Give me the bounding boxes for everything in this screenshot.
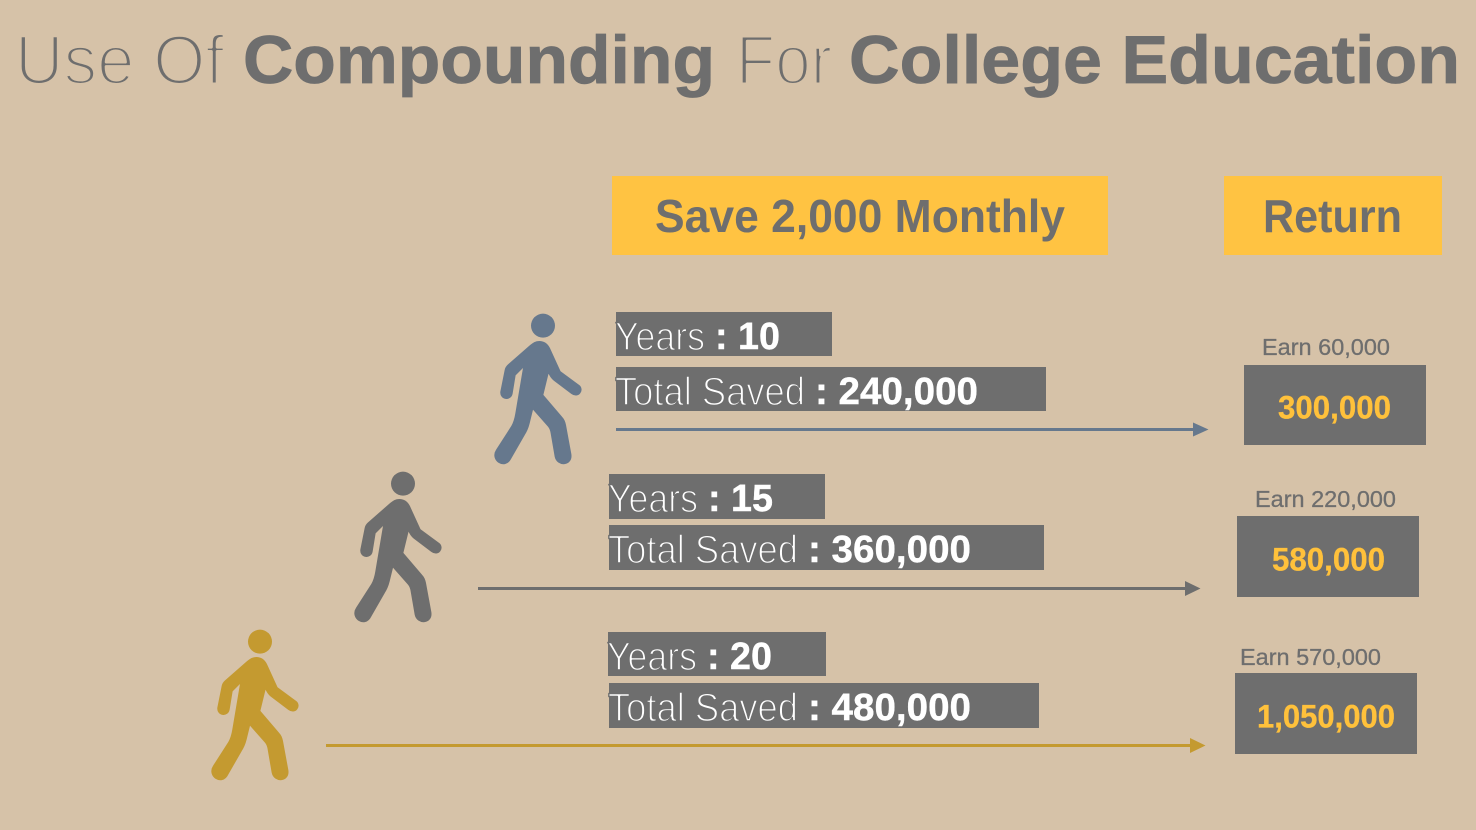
heading: return <box>1224 176 1442 255</box>
row 2: years: : 15 <box>708 478 773 520</box>
row 2: return box: 580,000 <box>1272 542 1385 578</box>
row 3: earnings label: Earn 570,000 <box>1240 644 1381 670</box>
heading: save 2,000 monthly: Save 2,000 Monthly <box>655 190 1065 242</box>
row 2: years <box>608 474 825 521</box>
row 3: years: : 20 <box>707 636 772 678</box>
arrow: row 3 <box>326 738 1206 753</box>
row 3: years <box>607 632 826 679</box>
icon: grey walking person <box>355 472 441 622</box>
row 3: return box: 1,050,000 <box>1257 698 1395 734</box>
row 1: total saved: : 240,000 <box>815 371 978 413</box>
row 2: earnings label: Earn 220,000 <box>1255 486 1396 512</box>
arrow: row 2 <box>478 581 1200 596</box>
title <box>15 21 1460 99</box>
heading: save 2,000 monthly <box>612 176 1108 255</box>
arrow: row 1 <box>616 422 1208 436</box>
title: Use Of <box>15 21 225 99</box>
icon: gold walking person <box>212 630 298 780</box>
row 3: total saved: : 480,000 <box>808 687 971 729</box>
icon: blue walking person <box>495 314 581 464</box>
row 3: total saved <box>608 683 1039 730</box>
row 1: years: Years <box>615 315 705 359</box>
row 2: total saved: : 360,000 <box>808 529 971 571</box>
row 2: years: Years <box>608 477 698 521</box>
row 2: total saved <box>608 525 1044 572</box>
row 3: total saved: Total Saved <box>608 686 798 730</box>
row 2: total saved: Total Saved <box>608 528 798 572</box>
row 1: years: : 10 <box>715 316 780 358</box>
title: For <box>736 21 832 99</box>
row 3: return box <box>1235 673 1417 754</box>
row 1: years <box>615 312 832 359</box>
heading: return: Return <box>1263 190 1402 242</box>
row 2: return box <box>1237 516 1419 597</box>
row 3: years: Years <box>607 635 697 679</box>
row 1: total saved <box>615 367 1046 414</box>
title: College Education <box>849 22 1460 98</box>
row 1: total saved: Total Saved <box>615 370 805 414</box>
title: Compounding <box>243 22 715 98</box>
row 1: return box: 300,000 <box>1278 390 1391 426</box>
row 1: earnings label: Earn 60,000 <box>1262 334 1390 360</box>
row 1: return box <box>1244 365 1426 445</box>
